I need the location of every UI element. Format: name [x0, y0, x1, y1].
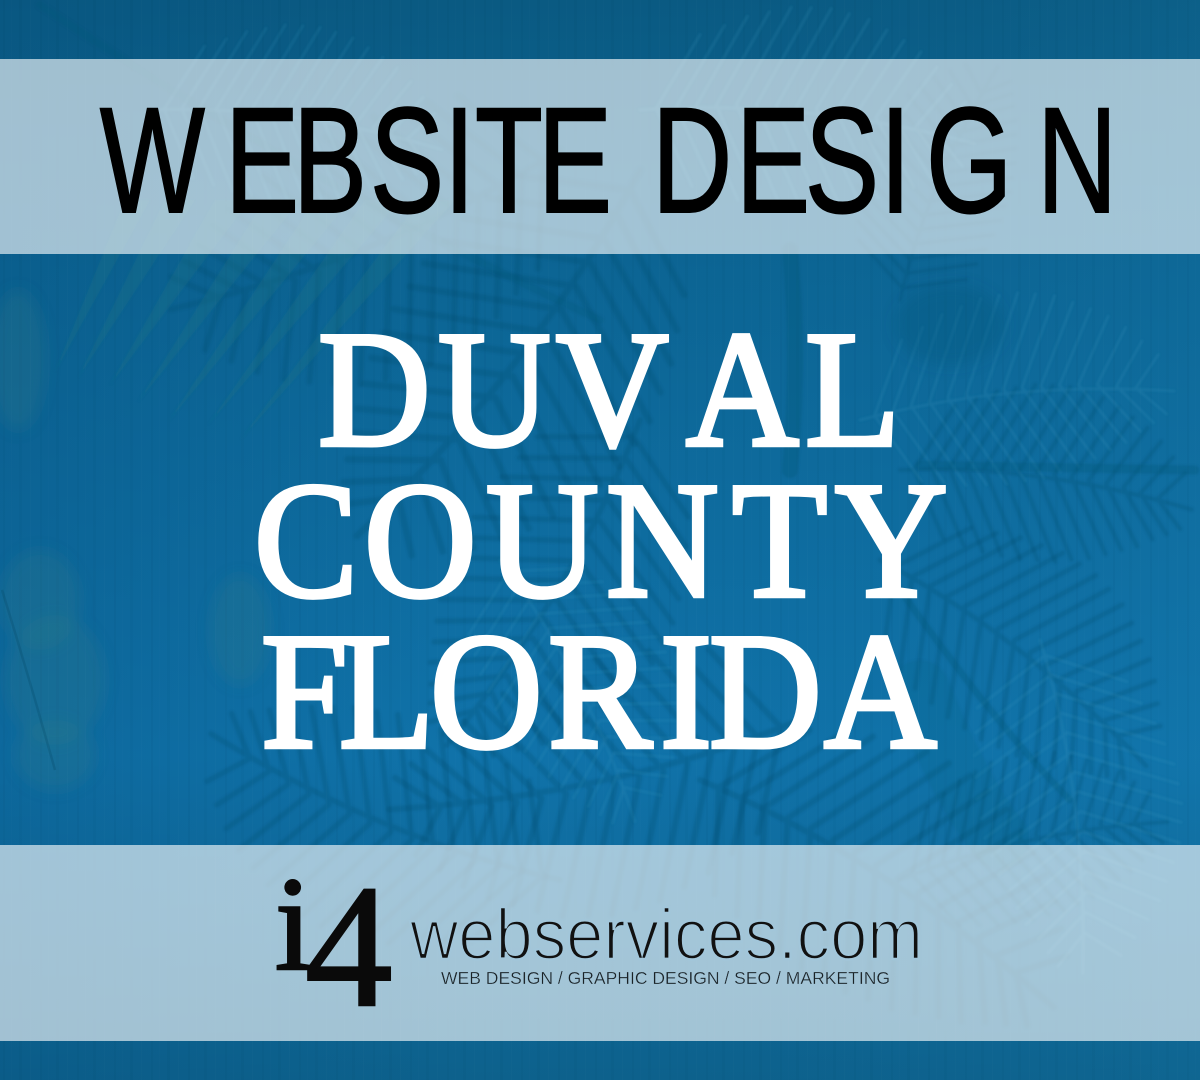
- logo tagline: WEB DESIGN / GRAPHIC DESIGN / SEO / MARKETING: [441, 968, 890, 988]
- logo: [275, 849, 923, 1043]
- bottom band: [0, 845, 1200, 1043]
- logo mark: i4: i: [275, 850, 312, 998]
- main title: location: FLORIDA: [261, 599, 937, 783]
- logo wordmark: webservices.com: [409, 896, 923, 975]
- drooping palm leaflets, upper left: [55, 200, 455, 440]
- main title: location: DUVAL: [318, 297, 900, 481]
- top band: [0, 59, 1200, 254]
- main title: location: [254, 297, 948, 783]
- heading: website design: WEBSITE DESIGN: [100, 77, 1117, 244]
- tree foliage left: [0, 290, 270, 790]
- dark foliage clump, upper right: [895, 285, 1005, 365]
- main title: location: COUNTY: [254, 448, 948, 632]
- logo mark: i4: 4: [305, 849, 392, 1043]
- palm shadow trunks: [40, 5, 1195, 840]
